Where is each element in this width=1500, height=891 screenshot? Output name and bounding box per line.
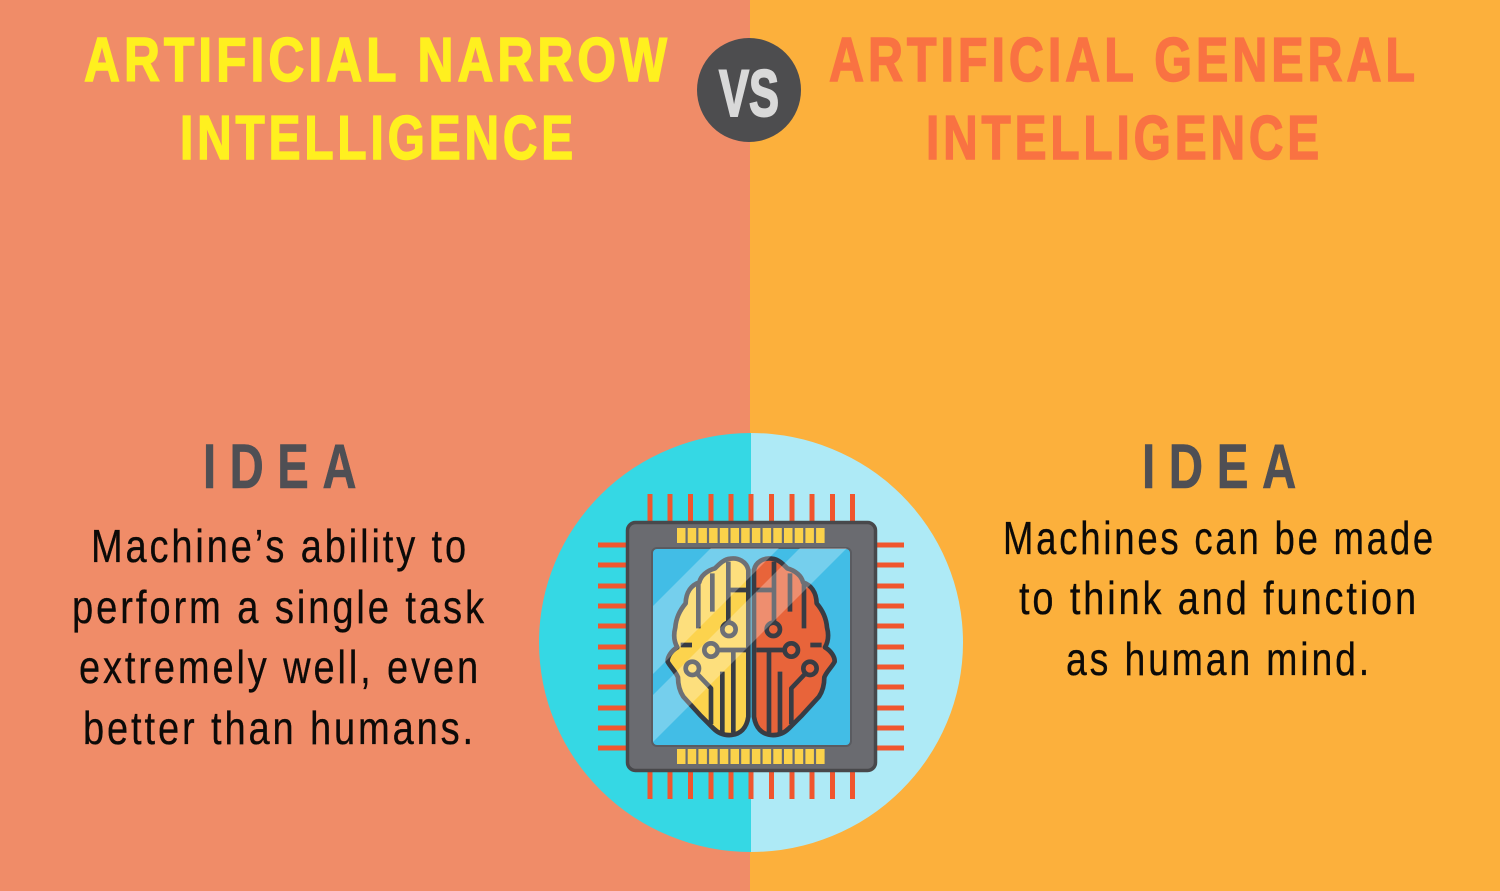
label: idea left: IDEA (203, 432, 370, 502)
text block: narrow idea (72, 432, 487, 754)
glass reflection (653, 548, 847, 742)
body text: narrow description: extremely well, even (79, 641, 481, 693)
heading: artificial general intelligence (829, 26, 1419, 173)
chip screen (652, 548, 851, 746)
top contact pads (677, 528, 825, 543)
text block: general idea (1003, 432, 1436, 685)
panel: general intelligence background (750, 0, 1500, 891)
body text: general description: to think and function (1019, 572, 1419, 624)
heading: artificial general intelligence: INTELLIGENCE (926, 104, 1323, 173)
body text: narrow description (72, 520, 487, 754)
heading: artificial narrow intelligence (84, 26, 671, 173)
body text: narrow description: perform a single task (72, 581, 487, 633)
body text: general description: as human mind. (1066, 633, 1372, 685)
body text: general description (1003, 512, 1436, 685)
right hemisphere (754, 558, 835, 735)
circle left half (539, 433, 751, 852)
left hemisphere (668, 558, 748, 735)
panel: narrow intelligence background (0, 0, 750, 891)
heading: artificial narrow intelligence: INTELLIGENCE (180, 104, 577, 173)
badge: VS: VS (719, 56, 779, 130)
chip body (628, 522, 876, 770)
bottom contact pads (677, 749, 825, 764)
body text: narrow description: Machine’s ability to (91, 520, 469, 572)
chip pins (598, 494, 904, 799)
heading: artificial narrow intelligence: ARTIFICIAL NARROW (84, 26, 671, 95)
brain (668, 558, 835, 735)
circle right half (751, 433, 963, 852)
badge: VS (697, 38, 801, 142)
icon: AI chip in two-tone circle (539, 433, 963, 852)
label: idea right: IDEA (1142, 432, 1310, 502)
body text: narrow description: better than humans. (83, 702, 476, 754)
